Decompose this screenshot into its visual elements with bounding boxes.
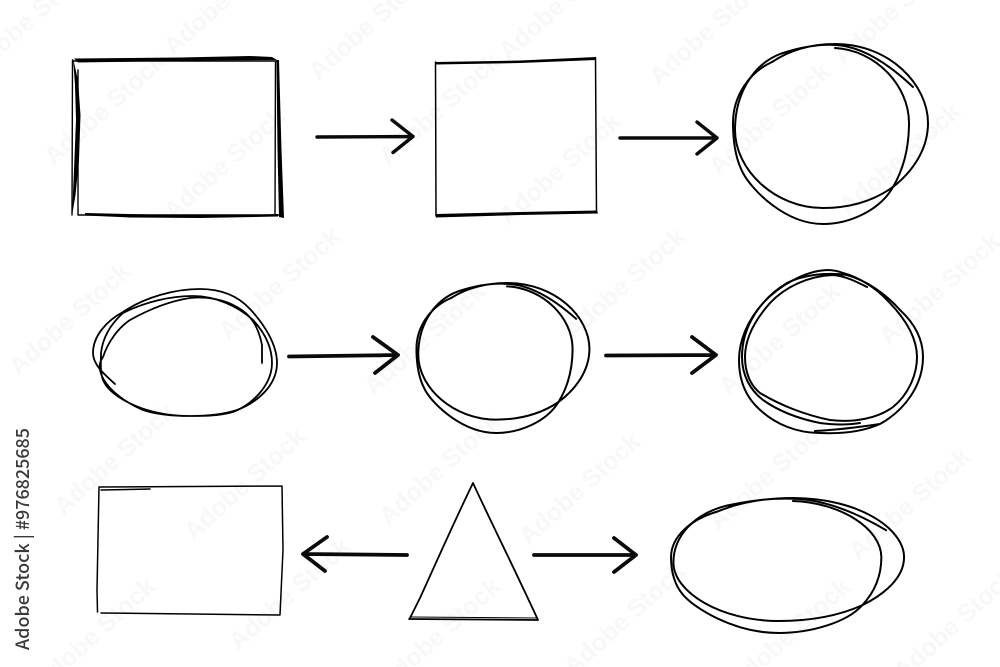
arrow: middle row second: [606, 337, 716, 373]
watermark pattern: Adobe Stock: [559, 222, 691, 346]
scribbled ellipse: bottom right: [671, 498, 904, 633]
arrow: middle row first: [289, 337, 398, 373]
sketched rectangle: top left: [72, 56, 284, 218]
arrow: bottom row pointing right: [534, 538, 636, 572]
arrow: bottom row pointing left: [303, 537, 407, 571]
watermark pattern: Adobe Stock: [704, 57, 836, 181]
scribbled oval: middle left: [93, 289, 277, 416]
watermark pattern: Adobe Stock: [49, 397, 181, 521]
watermark pattern: Adobe Stock: [39, 47, 171, 171]
sketched triangle: bottom center: [409, 483, 538, 620]
watermark pattern: Adobe Stock: [179, 422, 311, 546]
watermark pattern: Adobe Stock: [834, 97, 966, 221]
watermark pattern: Adobe Stock: [714, 277, 846, 401]
watermark pattern: Adobe Stock: [374, 47, 506, 171]
stock image credit: Adobe Stock | #976825685: [9, 428, 35, 650]
scribbled circle: top right: [733, 44, 928, 224]
watermark pattern: Adobe Stock: [494, 107, 626, 231]
watermark pattern: Adobe Stock: [224, 532, 356, 656]
arrow: top row first: [317, 120, 413, 152]
watermark pattern: Adobe Stock: [4, 257, 136, 381]
watermark pattern: Adobe Stock: [704, 412, 836, 536]
watermark pattern: Adobe Stock: [359, 277, 491, 401]
sketched rectangle: bottom left: [97, 486, 283, 615]
arrow: top row second: [620, 122, 717, 154]
watermark pattern: Adobe Stock: [514, 427, 646, 551]
scribbled circle: middle right: [739, 270, 923, 433]
watermark pattern: Adobe Stock: [374, 407, 506, 531]
watermark pattern: Adobe Stock: [214, 222, 346, 346]
watermark pattern: Adobe Stock: [844, 442, 976, 566]
watermark pattern: Adobe Stock: [159, 102, 291, 226]
sketched square: top middle: [436, 57, 598, 218]
scribbled circle: middle center: [416, 283, 589, 433]
